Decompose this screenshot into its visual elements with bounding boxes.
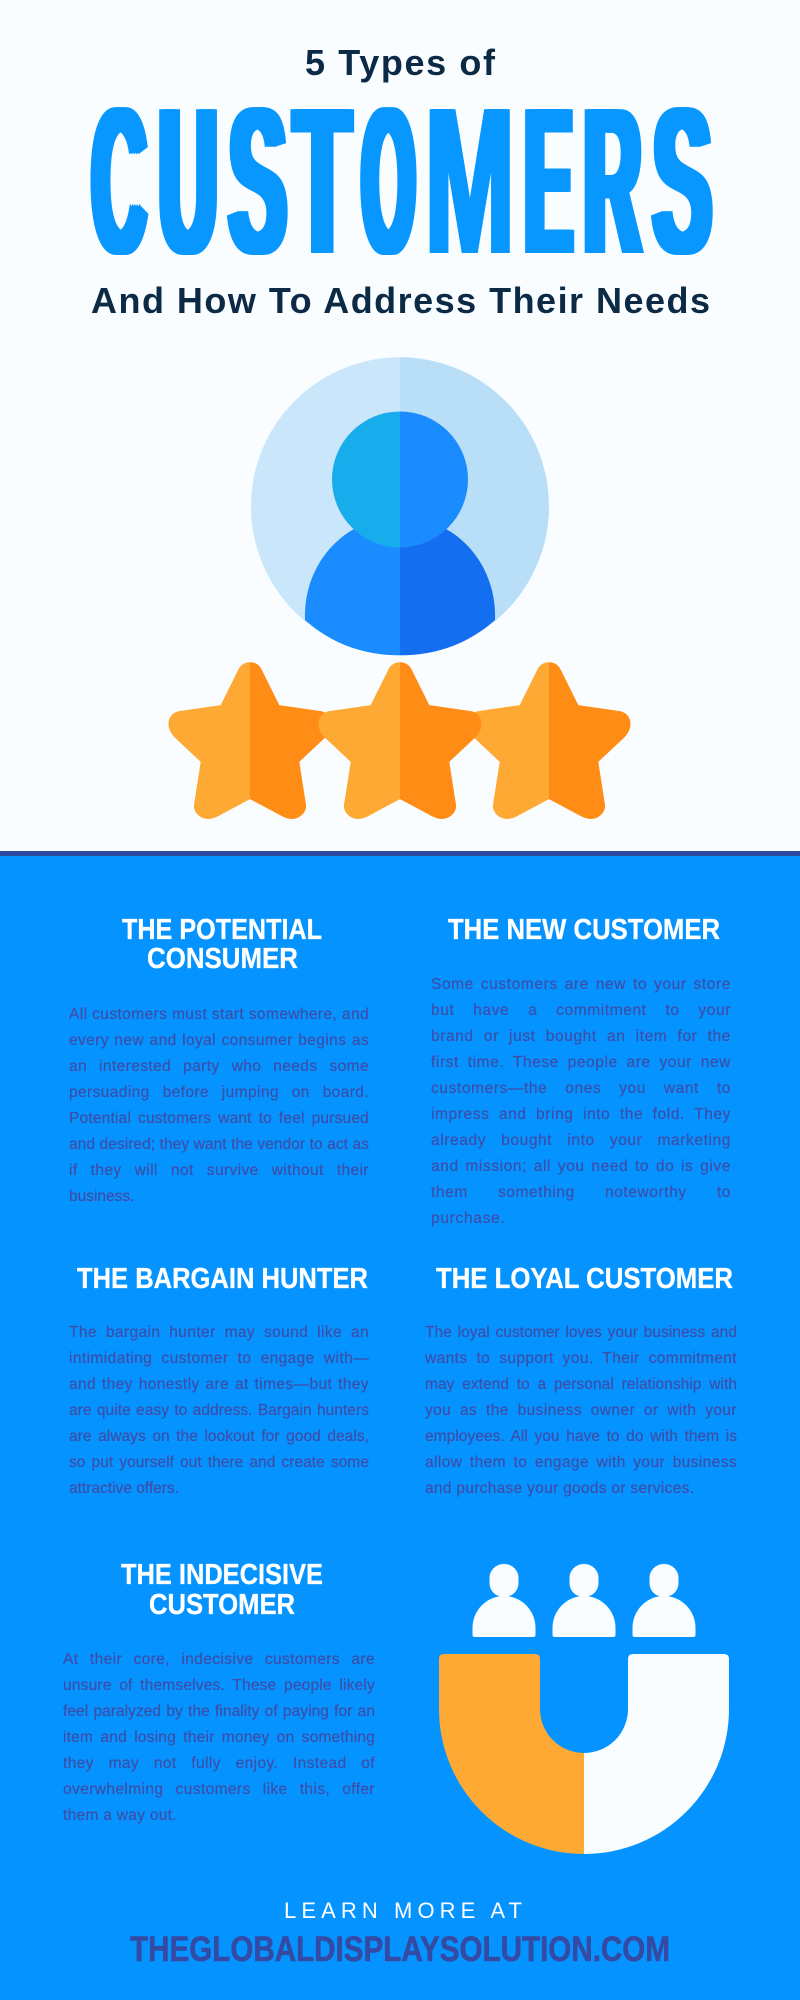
panel: the potential consumer — [69, 914, 369, 1205]
text: bargain hunter body: The bargain hunter may sound like an — [69, 1324, 369, 1341]
text: bargain hunter body: are always on the lookout for good deals, — [69, 1428, 369, 1445]
text: loyal customer body — [424, 1324, 737, 1497]
text: indecisive customer body: unsure of themselves. These people likely — [63, 1677, 375, 1694]
title main word: CUSTOMERS: C — [92, 65, 146, 298]
title line: 5 Types of: 5 Types of — [305, 42, 496, 83]
icon: three rating stars — [168, 662, 630, 819]
text: new customer body — [431, 976, 731, 1227]
text: potential consumer body: every new and loyal consumer begins as — [69, 1032, 369, 1049]
text: indecisive customer body: feel paralyzed by the finality of paying for an — [63, 1703, 375, 1720]
text: potential consumer body — [69, 1006, 369, 1205]
text: indecisive customer body: overwhelming customers like this, offer — [63, 1781, 375, 1798]
heading: the potential consumer: THE POTENTIAL — [122, 914, 322, 946]
icon: magnet attracting customers — [439, 1564, 729, 1854]
text: indecisive customer body: At their core, indecisive customers are — [63, 1651, 375, 1668]
text: new customer body: impress and bring into the fold. They — [431, 1106, 731, 1123]
icon: customer avatar in circle — [251, 357, 549, 656]
heading: the indecisive customer: CUSTOMER — [149, 1589, 295, 1621]
text: potential consumer body: if they will not survive without their — [69, 1162, 369, 1179]
title main word: CUSTOMERS: S — [229, 65, 287, 298]
panel: the loyal customer — [424, 1263, 737, 1497]
text: potential consumer body: and desired; they want the vendor to act as — [69, 1136, 369, 1153]
text: loyal customer body: wants to support you. Their commitment — [425, 1350, 737, 1367]
text: bargain hunter body: so put yourself out there and create some — [69, 1454, 369, 1471]
subtitle: And How To Address Their Needs — [91, 280, 710, 321]
heading: the new customer: THE NEW CUSTOMER — [448, 914, 720, 946]
heading: the bargain hunter: THE BARGAIN HUNTER — [77, 1263, 368, 1295]
heading: the loyal customer: THE LOYAL CUSTOMER — [436, 1263, 733, 1295]
text: potential consumer body: Potential customers want to feel pursued — [69, 1110, 369, 1127]
text: potential consumer body: persuading before jumping on board. — [69, 1084, 369, 1101]
text: new customer body: Some customers are new to your store — [431, 976, 731, 993]
text: bargain hunter body: intimidating customer to engage with— — [69, 1350, 369, 1367]
background: blue section — [0, 851, 800, 2000]
text: loyal customer body: employees. All you have to do with them is — [425, 1428, 737, 1445]
text: bargain hunter body: and they honestly are at times—but they — [69, 1376, 369, 1393]
panel: the bargain hunter — [69, 1263, 369, 1497]
title main word: CUSTOMERS: U — [159, 65, 217, 298]
text: potential consumer body: business. — [69, 1188, 134, 1205]
text: new customer body: but have a commitment to your — [431, 1002, 731, 1019]
heading: the potential consumer: CONSUMER — [147, 943, 298, 975]
text: indecisive customer body: item and losing their money on something — [63, 1729, 375, 1746]
text: indecisive customer body: them a way out. — [63, 1807, 177, 1824]
text: new customer body: purchase. — [431, 1210, 505, 1227]
text: new customer body: and mission; all you need to do is give — [431, 1158, 731, 1175]
text: new customer body: first time. These people are your new — [431, 1054, 731, 1071]
title main word: CUSTOMERS: R — [584, 65, 641, 298]
footer label: learn more at: LEARN MORE AT — [284, 1898, 522, 1923]
heading: the indecisive customer — [121, 1559, 323, 1621]
panel: the new customer — [431, 914, 731, 1227]
text: new customer body: them something noteworthy to — [431, 1184, 731, 1201]
title main word: CUSTOMERS: E — [525, 65, 572, 298]
text: new customer body: brand or just bought an item for the — [431, 1028, 731, 1045]
panel: the indecisive customer — [63, 1559, 375, 1824]
text: new customer body: already bought into your marketing — [431, 1132, 731, 1149]
heading: the indecisive customer: THE INDECISIVE — [121, 1559, 323, 1591]
text: bargain hunter body: are quite easy to address. Bargain hunters — [69, 1402, 369, 1419]
title main word: CUSTOMERS: T — [294, 65, 350, 298]
icon: three people — [472, 1564, 696, 1637]
text: bargain hunter body: attractive offers. — [69, 1480, 179, 1497]
text: indecisive customer body — [63, 1651, 375, 1824]
footer call to action — [130, 1898, 670, 1969]
footer url: THEGLOBALDISPLAYSOLUTION.COM — [130, 1930, 670, 1969]
background: top section — [0, 0, 800, 851]
text: bargain hunter body — [69, 1324, 369, 1497]
title main word: CUSTOMERS: O — [362, 65, 415, 298]
text: potential consumer body: an interested party who needs some — [69, 1058, 369, 1075]
title main word: CUSTOMERS: M — [425, 65, 515, 298]
text: loyal customer body: you as the business owner or with your — [425, 1402, 737, 1419]
text: loyal customer body: allow them to engage with your business — [425, 1454, 737, 1471]
title main word: CUSTOMERS — [90, 65, 713, 298]
text: indecisive customer body: they may not fully enjoy. Instead of — [63, 1755, 375, 1772]
text: loyal customer body: and purchase your goods or services. — [425, 1480, 694, 1497]
text: loyal customer body: may extend to a personal relationship with — [425, 1376, 737, 1393]
text: loyal customer body: The loyal customer loves your business and — [425, 1324, 737, 1341]
title main word: CUSTOMERS: S — [653, 65, 712, 298]
text: potential consumer body: All customers must start somewhere, and — [69, 1006, 369, 1023]
heading: the potential consumer — [122, 914, 322, 975]
text: new customer body: customers—the ones you want to — [431, 1080, 731, 1097]
